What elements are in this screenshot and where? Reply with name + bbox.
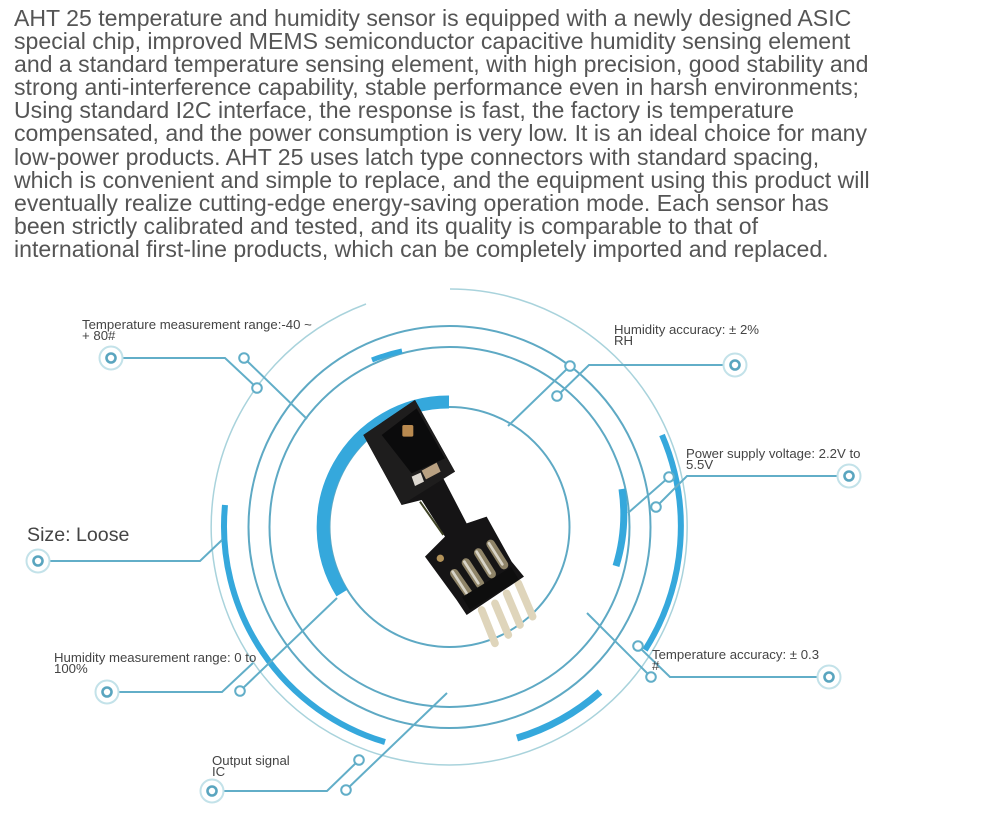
- label: size: Size: Loose: [27, 524, 129, 546]
- solder joints: [453, 543, 504, 593]
- label: humidity accuracy: [614, 322, 759, 348]
- intro paragraph: [14, 5, 870, 262]
- capacitor: [422, 463, 441, 479]
- connector: size: [26, 540, 222, 572]
- sensor module: [363, 400, 533, 643]
- connector: temperature measurement range: [100, 346, 307, 419]
- blue accent arcs: [224, 351, 681, 742]
- sensor head: [363, 400, 455, 505]
- connector: temperature accuracy: [587, 613, 840, 688]
- board edge highlight: [420, 502, 443, 535]
- label: temperature accuracy: [652, 647, 819, 672]
- label: output signal: [212, 753, 290, 778]
- intro paragraph: been strictly calibrated and tested, and its quality is comparable to that of: [14, 213, 758, 239]
- mounting pad: [437, 555, 444, 562]
- label: humidity measurement range: [54, 650, 256, 676]
- intro paragraph: eventually realize cutting-edge energy-saving operation mode. Each sensor has: [14, 190, 829, 216]
- label: temperature measurement range: + 80#: [82, 328, 115, 342]
- label: temperature accuracy: Temperature accuracy: ± 0.3: [652, 647, 819, 662]
- header pins: [482, 583, 533, 643]
- label: power supply voltage: [686, 446, 860, 472]
- intro paragraph: special chip, improved MEMS semiconductor capacitive humidity sensing element: [14, 28, 850, 54]
- intro paragraph: and a standard temperature sensing element, with high precision, good stability and: [14, 51, 868, 77]
- intro paragraph: international first-line products, which can be completely imported and replaced.: [14, 236, 829, 262]
- concentric rings: [211, 289, 687, 765]
- connector bar: [466, 573, 515, 603]
- label: temperature measurement range: [82, 317, 312, 342]
- label: power supply voltage: 5.5V: [686, 456, 713, 472]
- label: humidity measurement range: Humidity measurement range: 0 to: [54, 650, 256, 665]
- connector: humidity accuracy: [508, 354, 746, 426]
- label: humidity accuracy: RH: [614, 332, 633, 348]
- label: output signal: Output signal: [212, 753, 290, 768]
- label: power supply voltage: Power supply voltage: 2.2V to: [686, 446, 860, 461]
- label: temperature accuracy: #: [652, 658, 659, 672]
- connector: power supply voltage: [628, 464, 860, 513]
- intro paragraph: strong anti-interference capability, stable performance even in harsh environments;: [14, 74, 859, 100]
- label: humidity accuracy: Humidity accuracy: ± 2%: [614, 322, 759, 337]
- label: temperature measurement range: Temperature measurement range:-40 ~: [82, 317, 312, 332]
- connector: humidity measurement range: [96, 598, 337, 704]
- intro paragraph: AHT 25 temperature and humidity sensor is equipped with a newly designed ASIC: [14, 5, 851, 31]
- intro paragraph: Using standard I2C interface, the response is fast, the factory is temperature: [14, 97, 794, 123]
- label: output signal: IC: [212, 764, 225, 778]
- label: humidity measurement range: 100%: [54, 660, 88, 676]
- intro paragraph: low-power products. AHT 25 uses latch type connectors with standard spacing,: [14, 144, 819, 170]
- intro paragraph: which is convenient and simple to replace, and the equipment using this product will: [14, 167, 870, 193]
- sensor window: [402, 425, 413, 437]
- intro paragraph: compensated, and the power consumption is very low. It is an ideal choice for many: [14, 120, 867, 146]
- circuit board: [363, 400, 524, 615]
- connector: output signal: [200, 693, 447, 802]
